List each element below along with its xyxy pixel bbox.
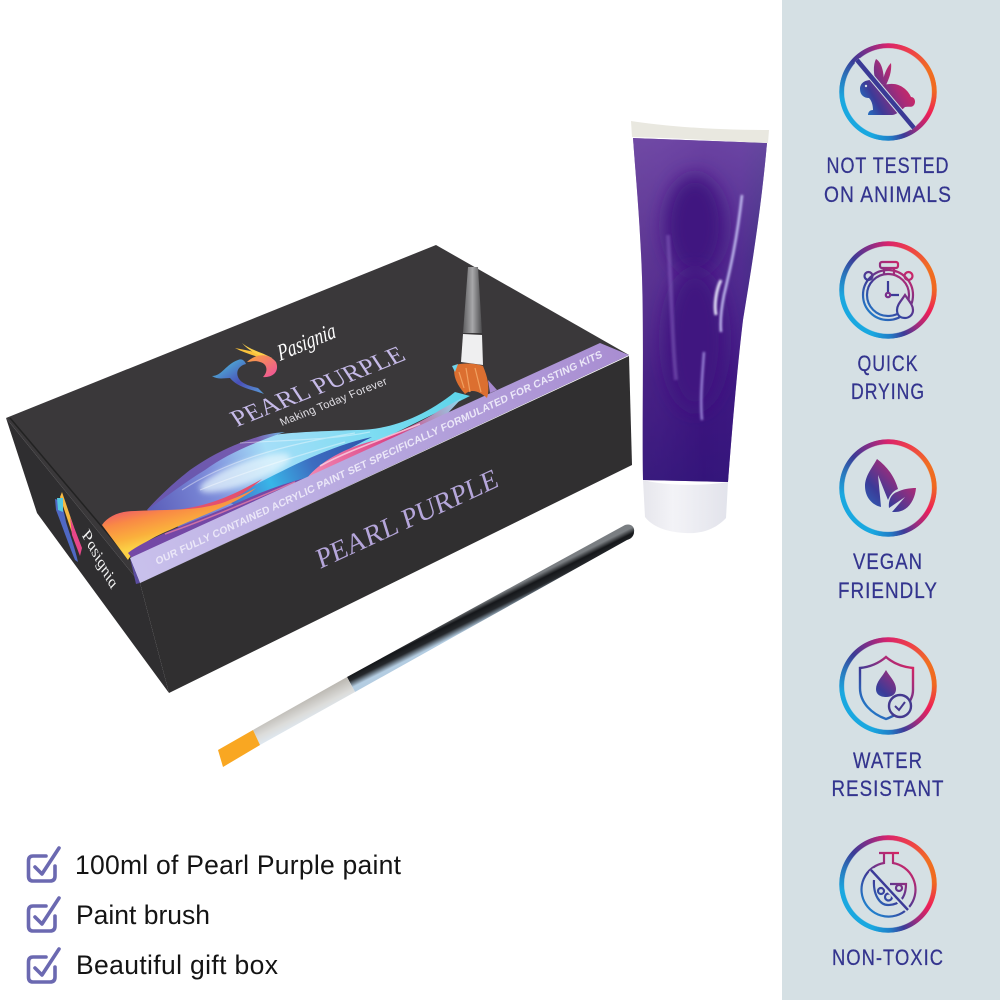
check item two: Paint brush xyxy=(76,900,210,930)
box left side face xyxy=(6,418,169,693)
tube cap xyxy=(643,480,728,533)
brush handle xyxy=(347,524,634,692)
stopwatch icon and label xyxy=(851,260,925,404)
side logo xyxy=(55,492,120,594)
rabbit icon and label: ON ANIMALS xyxy=(824,182,952,207)
ring xyxy=(839,43,937,141)
badge: water resistant xyxy=(832,637,944,801)
right sidebar panel xyxy=(782,0,1000,1000)
brand logo mark xyxy=(212,343,277,394)
badge: quick drying xyxy=(839,241,937,404)
ring xyxy=(839,835,937,933)
stopwatch icon and label: DRYING xyxy=(851,379,925,404)
flask icon and label: NON-TOXIC xyxy=(832,945,944,970)
flask icon and label xyxy=(832,852,944,970)
badge: non-toxic xyxy=(832,835,944,970)
leaves icon and label xyxy=(838,459,938,603)
loose paint brush xyxy=(218,524,634,767)
shield icon and label xyxy=(832,656,944,801)
check item one: 100ml of Pearl Purple paint xyxy=(75,850,402,880)
brush ferrule xyxy=(253,677,355,745)
checklist xyxy=(28,848,402,982)
paint swoosh artwork xyxy=(102,392,470,560)
front heading: pearl purple: PEARL PURPLE xyxy=(313,463,502,576)
check item three: Beautiful gift box xyxy=(76,950,278,980)
leaves icon and label: VEGAN xyxy=(853,549,923,574)
box front face xyxy=(140,356,632,693)
tube crimp seal xyxy=(631,121,769,143)
rabbit icon and label: NOT TESTED xyxy=(826,153,950,178)
top heading: pearl purple: PEARL PURPLE xyxy=(225,342,410,432)
stopwatch icon and label: QUICK xyxy=(858,351,918,376)
brush bristles xyxy=(218,730,260,767)
check item two xyxy=(28,898,210,931)
box artwork paintbrush xyxy=(452,267,497,398)
brand name: Pasignia xyxy=(274,318,338,366)
tube body xyxy=(630,135,770,485)
box top face xyxy=(6,245,629,583)
ring xyxy=(839,637,937,735)
side logo: Pasignia xyxy=(79,523,120,594)
purple band with text: OUR FULLY CONTAINED ACRYLIC PAINT SET SPECIFICALLY FORMULATED FOR CASTING KITS xyxy=(155,349,604,568)
badge: not tested on animals xyxy=(824,43,952,207)
paint tube xyxy=(630,121,770,533)
tagline: Making Today Forever xyxy=(278,376,390,429)
leaves icon and label: FRIENDLY xyxy=(838,578,938,603)
ring xyxy=(839,439,937,537)
rabbit icon and label xyxy=(824,58,952,207)
shield icon and label: WATER xyxy=(853,748,923,773)
ring xyxy=(839,241,937,339)
product illustration: box, tube and brush xyxy=(6,121,769,984)
gift box xyxy=(6,245,632,693)
shield icon and label: RESISTANT xyxy=(832,776,944,801)
badge: vegan friendly xyxy=(838,439,938,603)
